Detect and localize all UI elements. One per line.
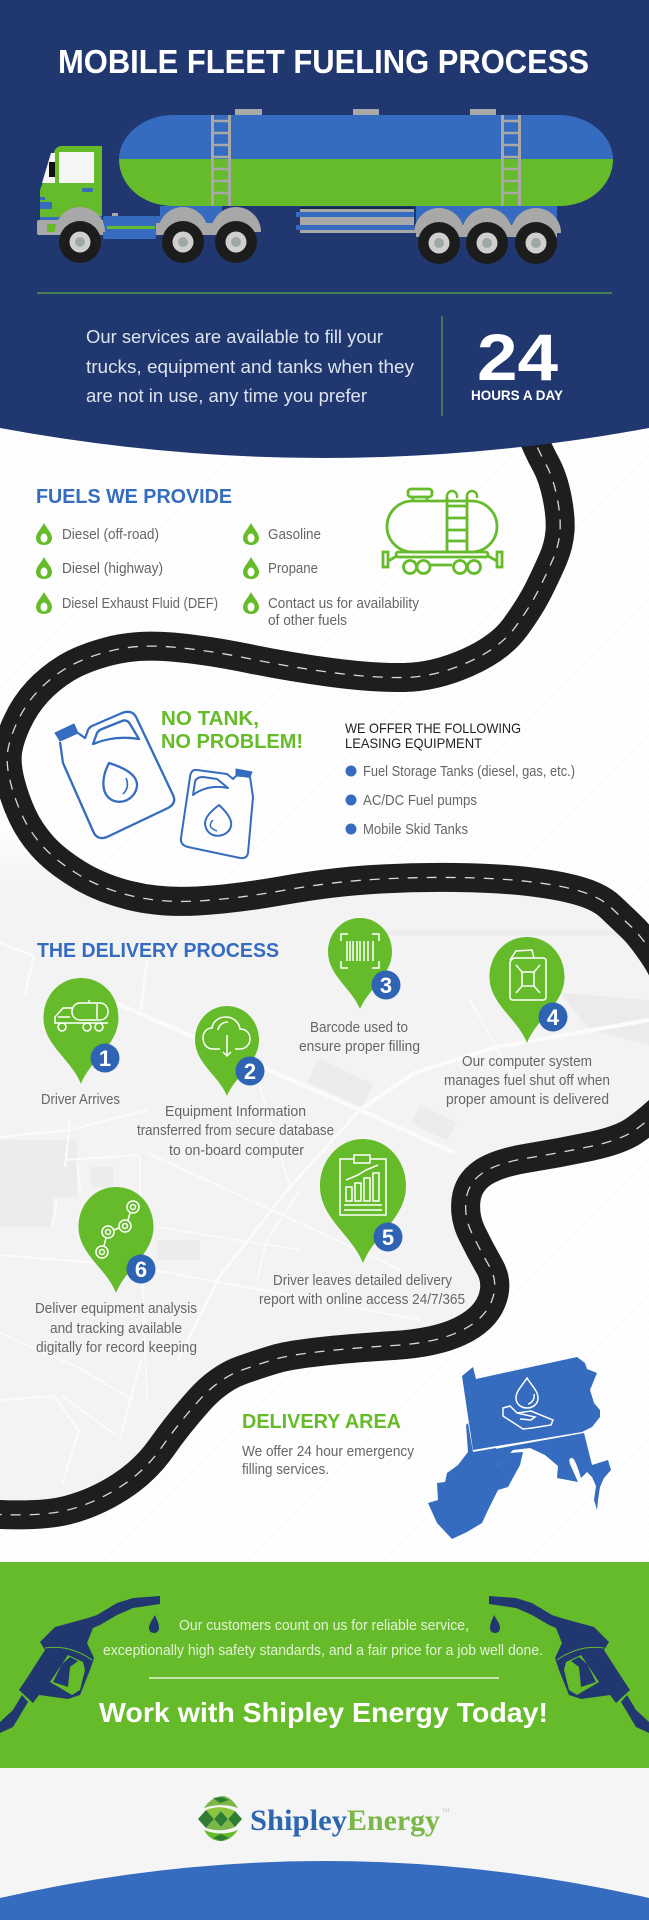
text block: We offer 24 hour emergency	[242, 1444, 415, 1460]
panel: call to action	[0, 1562, 649, 1768]
icon: tank car	[383, 489, 502, 574]
icon: small fuel can	[181, 769, 253, 858]
step 2: equipment information: transferred from secure database	[137, 1123, 334, 1139]
intro text: trucks, equipment and tanks when they	[86, 356, 415, 377]
intro text: are not in use, any time you prefer	[86, 385, 367, 406]
cta text: Our customers count on us for reliable service,	[179, 1618, 469, 1634]
step 5: delivery report	[259, 1139, 465, 1308]
step 4: computer system: proper amount is delivered	[446, 1092, 609, 1108]
leasing list: Fuel Storage Tanks (diesel, gas, etc.)	[363, 764, 575, 780]
step 4: computer system: manages fuel shut off when	[444, 1073, 610, 1089]
city map background	[0, 874, 649, 1500]
map: service region	[428, 1357, 611, 1539]
step 4: computer system	[444, 937, 610, 1108]
leasing heading: WE OFFER THE FOLLOWING	[345, 720, 521, 736]
cta text: exceptionally high safety standards, and a fair price for a job well done.	[103, 1643, 543, 1659]
winding road	[0, 430, 649, 1515]
step 6: equipment analysis: and tracking available	[50, 1321, 182, 1337]
leasing bullets	[346, 766, 356, 834]
heading: NO TANK,	[161, 708, 259, 730]
fenders	[55, 207, 561, 233]
step 6: equipment analysis: Deliver equipment analysis	[35, 1301, 197, 1317]
step 1: driver arrives	[41, 978, 120, 1108]
trailer chassis	[156, 206, 557, 237]
heading: DELIVERY AREA	[242, 1411, 401, 1433]
leasing heading: LEASING EQUIPMENT	[345, 735, 482, 751]
stat: 24 hours a day: 24	[477, 320, 558, 394]
fuel list: Propane	[268, 561, 318, 577]
text block	[242, 1444, 415, 1478]
step 3: barcode	[299, 918, 420, 1055]
icon: large fuel can	[55, 712, 174, 838]
fuel list: Contact us for availability	[268, 596, 420, 612]
icon: left fuel nozzle	[0, 1596, 160, 1733]
tank hatches	[235, 109, 496, 116]
panel: header	[0, 0, 649, 458]
step 4: computer system: 4	[547, 1005, 560, 1030]
icon: fuel drops	[36, 523, 259, 614]
wordmark: Energy	[347, 1804, 440, 1837]
text block: filling services.	[242, 1462, 329, 1478]
leasing list: AC/DC Fuel pumps	[363, 793, 477, 809]
wordmark	[250, 1804, 450, 1837]
step 6: equipment analysis: 6	[135, 1257, 147, 1282]
ladders	[212, 115, 520, 206]
intro text	[86, 326, 415, 406]
fuel list: Diesel (off-road)	[62, 527, 159, 543]
icon: tanker truck	[37, 109, 613, 264]
logo: Shipley Energy	[198, 1796, 450, 1841]
cta heading: Work with Shipley Energy Today!	[99, 1697, 548, 1728]
step 2: equipment information: to on-board computer	[169, 1143, 304, 1159]
title: MOBILE FLEET FUELING PROCESS	[58, 43, 589, 80]
panel: the delivery process	[35, 918, 610, 1356]
step 5: delivery report: Driver leaves detailed delivery	[273, 1273, 453, 1289]
step 5: delivery report: 5	[382, 1225, 394, 1250]
step 4: computer system: Our computer system	[462, 1054, 592, 1070]
step 6: equipment analysis: digitally for record keeping	[36, 1340, 197, 1356]
intro text: Our services are available to fill your	[86, 326, 383, 347]
cta text	[103, 1618, 543, 1659]
fuel list: Diesel (highway)	[62, 561, 163, 577]
step 3: barcode: 3	[380, 973, 392, 998]
wheels	[59, 221, 557, 264]
icon: right fuel nozzle	[489, 1596, 649, 1733]
icon: drop in hand	[503, 1378, 553, 1429]
step 2: equipment information	[137, 1006, 334, 1159]
panel: delivery area	[242, 1357, 611, 1539]
heading: FUELS WE PROVIDE	[36, 486, 232, 508]
wordmark: Shipley	[250, 1804, 347, 1837]
fuel list: Gasoline	[268, 527, 321, 543]
emblem	[198, 1796, 242, 1841]
heading: THE DELIVERY PROCESS	[37, 940, 279, 962]
leasing list	[363, 764, 575, 838]
tank	[119, 115, 613, 206]
step 3: barcode: Barcode used to	[310, 1020, 408, 1036]
wordmark: TM	[442, 1809, 450, 1814]
step 2: equipment information: Equipment Information	[165, 1104, 306, 1120]
fuel list: Diesel Exhaust Fluid (DEF)	[62, 596, 218, 612]
step 6: equipment analysis	[35, 1187, 197, 1356]
panel: no tank, no problem	[55, 708, 575, 858]
fuel list: of other fuels	[268, 613, 347, 629]
step 3: barcode: ensure proper filling	[299, 1039, 420, 1055]
panel: footer	[0, 1768, 649, 1920]
cab	[37, 146, 156, 239]
step 2: equipment information: 2	[244, 1059, 256, 1084]
fuel list	[62, 527, 420, 629]
leasing heading	[345, 720, 521, 751]
heading: NO PROBLEM!	[161, 731, 303, 753]
leasing list: Mobile Skid Tanks	[363, 822, 468, 838]
step 5: delivery report: report with online access 24/7/365	[259, 1292, 465, 1308]
heading	[161, 708, 303, 753]
panel: fuels we provide	[36, 486, 502, 629]
step 1: driver arrives: 1	[99, 1046, 111, 1071]
stat: 24 hours a day: HOURS A DAY	[471, 387, 564, 403]
step 1: driver arrives: Driver Arrives	[41, 1092, 120, 1108]
